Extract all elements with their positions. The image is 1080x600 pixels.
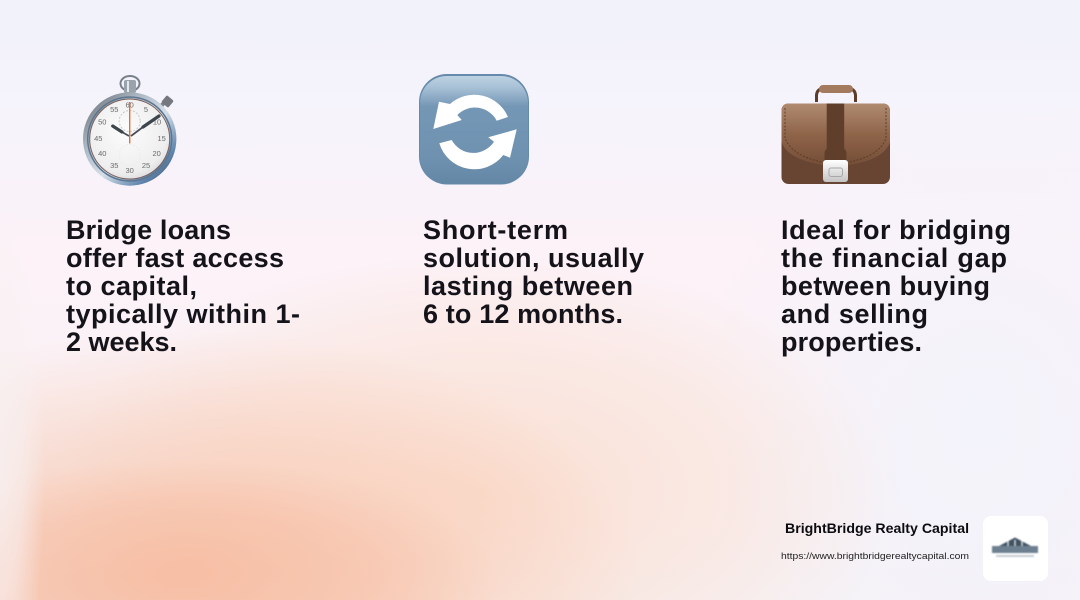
text block: short-term xyxy=(423,215,644,329)
icon: stopwatch: 60 xyxy=(126,100,134,110)
text block: financial gap: Ideal for bridging xyxy=(781,215,1011,245)
brand name and URL xyxy=(781,521,969,562)
text block: fast access: Bridge loans xyxy=(66,215,231,245)
text block: short-term: 6 to 12 months. xyxy=(423,299,623,329)
icon: stopwatch: 15 xyxy=(158,134,166,143)
text block: fast access: to capital, xyxy=(66,271,197,301)
icon: stopwatch: 50 xyxy=(98,118,106,126)
text block: short-term: lasting between xyxy=(423,271,633,301)
brand name and URL: BrightBridge Realty Capital xyxy=(785,521,969,536)
icon: arrows in blue button xyxy=(419,74,529,184)
icon: stopwatch: 45 xyxy=(94,134,102,143)
icon: stopwatch: 30 xyxy=(126,166,134,175)
brand name and URL: https://www.brightbridgerealtycapital.com xyxy=(781,551,969,562)
icon: briefcase xyxy=(782,85,890,184)
logo tile xyxy=(983,516,1048,581)
icon: stopwatch: 40 xyxy=(98,149,106,158)
text block: financial gap: the financial gap xyxy=(781,243,1007,273)
text block: fast access: 2 weeks. xyxy=(66,327,177,357)
icon: stopwatch: 55 xyxy=(110,105,118,114)
text block: fast access: offer fast access xyxy=(66,243,284,273)
text block: short-term: solution, usually xyxy=(423,243,644,273)
icon: stopwatch: 5 xyxy=(144,105,148,114)
icon: stopwatch: 10 xyxy=(153,118,161,126)
text block: fast access: typically within 1- xyxy=(66,299,300,329)
text block: financial gap: properties. xyxy=(781,327,922,357)
icon: stopwatch: 20 xyxy=(153,149,161,158)
icon: stopwatch: 25 xyxy=(142,161,150,170)
text block: fast access xyxy=(66,215,300,357)
text block: financial gap xyxy=(781,215,1011,357)
text block: short-term: Short-term xyxy=(423,215,568,245)
icon: stopwatch xyxy=(83,75,176,186)
icon: stopwatch: 35 xyxy=(110,161,118,170)
text block: financial gap: and selling xyxy=(781,299,928,329)
text block: financial gap: between buying xyxy=(781,271,990,301)
